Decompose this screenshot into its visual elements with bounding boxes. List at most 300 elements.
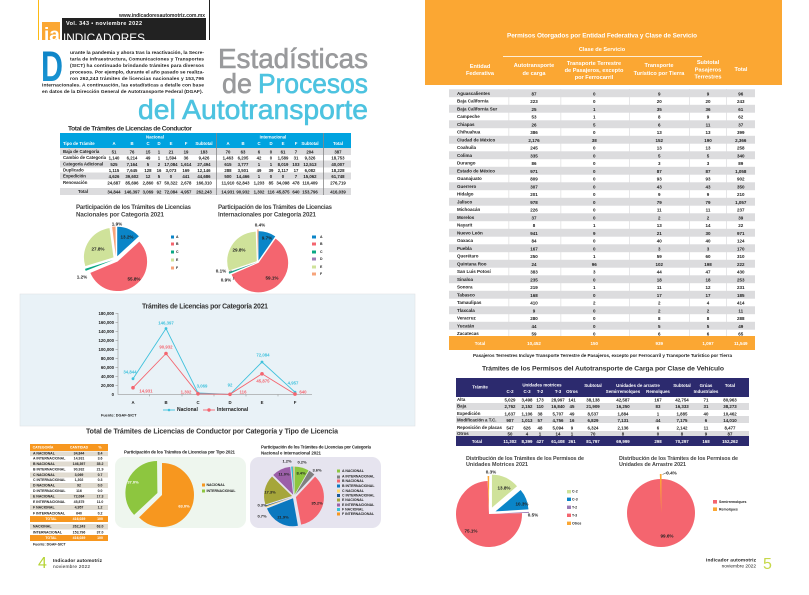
rows: 21: [657, 230, 662, 235]
rows: 1,013: [522, 418, 533, 422]
series: internacional: 14,931: [139, 388, 153, 394]
table rows: 2,678: [181, 180, 192, 185]
table rows: 0: [270, 174, 273, 178]
rows: 90,932: [74, 467, 84, 471]
series: nacional: 92: [228, 382, 233, 388]
rows: A NACIONAL: [33, 452, 56, 456]
column headings: Federativa: [466, 71, 495, 77]
rows: Sonora: [457, 284, 473, 290]
rows: 40: [705, 238, 711, 243]
total row: 427: [536, 438, 544, 444]
rows: 1.2: [98, 505, 102, 509]
rows: 245: [530, 145, 538, 150]
table rows: 70: [226, 149, 231, 154]
rows: 3,498: [522, 397, 533, 402]
rows: 6: [657, 425, 660, 430]
table rows: 3,069: [143, 189, 154, 194]
rows: 210: [737, 192, 745, 196]
rows: 243: [737, 98, 745, 104]
table rows: 166,310: [196, 180, 212, 185]
rows: 0: [593, 199, 596, 204]
rows: 2: [658, 215, 661, 220]
table rows: Renovación: [63, 180, 88, 185]
rows: 1: [539, 431, 542, 436]
rows: 35: [657, 106, 662, 111]
class heading: Clase de Servicio: [579, 47, 626, 53]
rows: 42,754: [675, 397, 689, 402]
pie legend: Otros: [572, 521, 581, 525]
rows: TOTAL: [45, 536, 58, 540]
table rows: 51: [112, 149, 117, 154]
rows: 50: [508, 431, 513, 436]
rows: 8: [533, 222, 536, 228]
rows: 153,796: [73, 530, 85, 534]
rows: Reposición de placas: [457, 425, 502, 430]
rows: 5,707: [552, 411, 564, 416]
rows: Modificación a T.C.: [457, 418, 497, 422]
total row: Total: [472, 438, 482, 444]
header labels: %: [98, 446, 102, 450]
footer: page 4: Indicador automotriz: [53, 558, 103, 564]
table rows: 61: [281, 149, 286, 154]
column headings: Autotransporte: [514, 63, 554, 69]
rows: 2,762: [504, 404, 516, 408]
pie value labels: 0.4%: [255, 222, 265, 228]
rows: 640: [76, 511, 82, 515]
table rows: 640: [292, 189, 300, 194]
table rows: 18,228: [331, 168, 345, 172]
table rows: 262,243: [196, 189, 212, 194]
rows: 350: [737, 184, 745, 189]
pie legend: NACIONAL: [206, 483, 226, 487]
rows: 0: [593, 176, 596, 181]
pie legend: C: [176, 250, 179, 254]
rows: 63.0: [97, 525, 103, 529]
table rows: 1,463: [223, 155, 234, 160]
rows: 45: [570, 404, 575, 408]
pie value labels: 3.6%: [312, 468, 322, 472]
rows: 110: [536, 404, 544, 408]
intro paragraph with drop cap: taría de Infraestructura, Comunicaciones y Transportes: [70, 56, 204, 62]
rows: 1,057: [735, 199, 747, 204]
table rows: 9,426: [199, 155, 210, 160]
table rows: 18,753: [331, 155, 345, 160]
pie value labels: 59.1%: [265, 276, 279, 280]
rows: 124: [737, 238, 745, 243]
rows: [457, 397, 737, 436]
chart heading: Distribución de los Trámites de los Permisos de: [619, 456, 738, 462]
table header labels: Total: [333, 140, 343, 146]
rows: 39: [738, 215, 744, 220]
rows: 1,885: [676, 411, 688, 416]
table rows: 7: [295, 149, 298, 154]
chart heading: Nacional e Internacional 2021: [261, 450, 322, 456]
table rows: 85,696: [125, 180, 139, 185]
table rows: 500: [224, 174, 232, 178]
table rows: 1: [158, 155, 161, 160]
rows: 11.0: [97, 500, 103, 504]
rows: 18: [705, 277, 711, 282]
rows: 223: [530, 98, 538, 104]
pie value labels: 0.3%: [257, 502, 267, 508]
axes: 140,000: [98, 329, 115, 334]
rows: 9: [658, 91, 661, 96]
pie value labels: 17.3%: [264, 490, 276, 494]
rows: 978: [530, 199, 538, 204]
table header band: [60, 133, 351, 148]
table rows: 615: [224, 162, 232, 166]
rows: 9: [707, 114, 710, 119]
table rows: 61,748: [331, 174, 345, 178]
table rows: 85: [269, 180, 274, 185]
rows: Jalisco: [457, 199, 473, 204]
table rows: 16: [157, 168, 162, 172]
rows: 288: [737, 316, 745, 320]
table rows: 3,501: [238, 168, 249, 172]
row bands: [449, 89, 755, 330]
total row: 8,399: [522, 438, 533, 444]
rows: 1,637: [504, 411, 516, 416]
rows: 7,131: [618, 418, 629, 422]
pie legend: A: [320, 235, 323, 239]
table rows: 4,957: [181, 189, 192, 194]
rows: 414: [737, 300, 745, 305]
table rows: 116: [268, 189, 275, 194]
rows: 79: [705, 199, 711, 204]
column headings: Entidad: [470, 64, 491, 70]
rows: 40: [704, 411, 709, 416]
rows: 20: [657, 98, 662, 104]
rows: 1,884: [618, 411, 629, 416]
header labels: [472, 382, 735, 394]
rows: Durango: [457, 160, 476, 166]
rows: 173: [536, 397, 544, 402]
rows: 9: [533, 308, 536, 313]
rows: 258: [737, 145, 745, 150]
rows: Coahuila: [457, 145, 476, 150]
rows: 9: [593, 230, 596, 235]
pie legend: Semirremolques: [719, 500, 746, 504]
rows: Baja California: [457, 98, 489, 104]
leader lines: [229, 271, 234, 280]
pie legend: [713, 500, 746, 511]
rows: 3.6: [98, 457, 102, 461]
rows: 36: [705, 106, 711, 111]
rows: E INTERNACIONAL: [33, 500, 66, 504]
total row: 61,408: [551, 438, 565, 444]
intro paragraph with drop cap: urante la pandemia y ahora tras la reactivación, la Secre-: [70, 50, 204, 56]
column headings: por Ferrocarril: [575, 75, 614, 81]
table rows: 1,302: [254, 189, 265, 194]
column headings: Pasajeros: [695, 68, 721, 74]
intro paragraph with drop cap: en datos de la Dirección General de Autotransporte Federal (DGAF).: [42, 89, 204, 95]
rows: 971: [737, 230, 745, 235]
rows: 87: [728, 431, 733, 436]
column headings: Transporte: [645, 63, 673, 69]
rows: 399: [737, 130, 745, 134]
rows: 87: [657, 168, 662, 173]
rows: 416,039: [73, 536, 85, 540]
chart legend: [163, 407, 249, 413]
table rows: 14,466: [236, 174, 250, 178]
rows: 83: [656, 404, 661, 408]
rows: 14,931: [74, 457, 84, 461]
table rows: Cambio de Categoría: [63, 155, 107, 160]
total row: [456, 436, 749, 446]
rows: 253: [737, 277, 745, 282]
table header labels: E: [282, 140, 285, 146]
column headings: Terrestres: [695, 74, 721, 80]
rows: 12: [705, 284, 711, 290]
rows: 0: [593, 145, 596, 150]
rows: 21,909: [586, 404, 600, 408]
panel: orange header permisos por entidad: [425, 0, 782, 85]
series: internacional: 116: [240, 390, 247, 394]
table rows: 1: [158, 149, 161, 154]
table rows: 153,796: [302, 189, 318, 194]
pie legend: A: [176, 235, 179, 239]
pie value labels: 37.0%: [127, 480, 139, 484]
rows: 14,010: [723, 418, 737, 422]
axes: 80,000: [101, 356, 115, 361]
rows: Morelos: [457, 215, 475, 220]
chart legend: Internacional: [217, 407, 249, 413]
pie legend: C-3: [572, 497, 578, 501]
table rows: 63: [241, 149, 246, 154]
rows: Michoacán: [457, 207, 481, 212]
header labels: C-3: [523, 388, 531, 394]
rows: 2,366: [735, 137, 747, 142]
table rows: 7,645: [127, 168, 138, 172]
total row: [449, 336, 755, 350]
rows: 59: [531, 331, 537, 336]
heading: Permisos Otorgados por Entidad Federativa y Clase de Servicio: [507, 32, 697, 40]
table rows: 146,397: [124, 189, 140, 194]
table rows: 276,719: [330, 180, 346, 185]
rows: 9: [658, 192, 661, 196]
axes: A: [131, 400, 135, 404]
pie slices: [627, 473, 695, 547]
table rows: 6: [258, 149, 261, 154]
rows: 1: [593, 114, 596, 119]
rows: 152: [656, 137, 664, 142]
header band: [456, 378, 749, 397]
table note: Pasajeros Terrestres Incluye Transporte Terrestre de Pasajeros, excepto por Ferrocarril y Transporte Turístico por Tierra: [473, 353, 732, 358]
page header: masthead: INDICADORES: [63, 31, 145, 45]
column headings: [466, 60, 748, 81]
rows: 3: [707, 160, 710, 166]
rows: 11: [706, 122, 711, 127]
rows: 971: [530, 168, 538, 173]
chart heading: [261, 444, 372, 456]
intro paragraph with drop cap: ron 262,243 trámites de licencias nacionales y 153,796: [70, 76, 204, 82]
rows: A INTERNACIONAL: [33, 457, 66, 461]
rows: 0: [593, 277, 596, 282]
panel background: [250, 457, 381, 528]
table rows: 1,115: [109, 168, 120, 172]
rows: 2,142: [676, 425, 688, 430]
rows: Baja: [457, 404, 467, 408]
table rows: 204: [306, 149, 314, 154]
table rows: 40,007: [331, 162, 345, 166]
rows: 14: [556, 431, 561, 436]
series: nacional: 34,844: [123, 370, 137, 374]
main title: Estadísticas: [218, 43, 368, 74]
chart heading: Unidades de Arrastre 2021: [619, 462, 686, 468]
axes: D: [228, 400, 232, 404]
rows: Veracruz: [457, 316, 477, 320]
table rows: 17: [294, 168, 299, 172]
rows: 4,957: [75, 505, 83, 509]
header labels: CANTIDAD: [70, 446, 89, 450]
rows: 48: [538, 425, 543, 430]
rows: 1: [593, 284, 596, 290]
table rows: 1: [258, 162, 261, 166]
rows: 16,250: [616, 404, 630, 408]
rows: 198: [704, 261, 712, 266]
table rows: 7,164: [127, 162, 138, 166]
rows: Nuevo León: [457, 230, 483, 235]
rows: 38,138: [586, 397, 600, 402]
rows: 170: [737, 246, 745, 251]
rows: 2,136: [618, 425, 629, 430]
rows: 0: [593, 91, 596, 96]
rows: 100: [97, 517, 103, 521]
table rows: 0: [282, 174, 285, 178]
table: total de trámites de licencias de conductor: [60, 126, 351, 195]
rows: 8,537: [588, 411, 599, 416]
rows: [33, 452, 103, 540]
rows: 53: [531, 114, 537, 119]
pie chart: licencias internacionales por categoría: [216, 204, 333, 283]
pie value labels: [216, 222, 279, 282]
rows: 22: [738, 222, 744, 228]
rows: 167: [530, 246, 538, 251]
table rows: 11,910: [222, 180, 235, 185]
rows: 4: [707, 300, 710, 305]
pie value labels: 0.5%: [528, 512, 538, 518]
rows: 0: [593, 160, 596, 166]
table header labels: E: [170, 140, 173, 146]
main title: de: [222, 68, 252, 99]
rows: 6,324: [588, 425, 599, 430]
rows: 6: [658, 331, 661, 336]
pie value labels: 10.3%: [515, 502, 529, 506]
series: nacional: 4,957: [288, 380, 299, 386]
column headings: Turístico por Tierra: [634, 71, 685, 77]
chart heading: [466, 456, 584, 468]
rows: 65: [738, 331, 744, 336]
pie legend: E NACIONAL: [342, 498, 365, 502]
series: internacional: [131, 344, 307, 396]
rows: 5,094: [552, 425, 564, 430]
rows: 3: [658, 160, 661, 166]
total row: 152,262: [722, 438, 738, 444]
rows: F INTERNACIONAL: [33, 511, 66, 515]
pie value labels: 13.8%: [497, 486, 511, 490]
rows: 1: [657, 411, 660, 416]
rows: 37: [531, 215, 537, 220]
pie value labels: 55.8%: [127, 276, 141, 282]
rows: 235: [530, 277, 538, 282]
total row: Total: [475, 340, 485, 346]
rows: 93: [657, 176, 662, 181]
rows: 47: [705, 269, 711, 274]
rows: 2: [658, 300, 661, 305]
table rows: 4,626: [109, 174, 120, 178]
table rows: 90,932: [236, 189, 250, 194]
axes: C: [196, 400, 200, 404]
table heading: Trámites de los Permisos del Autotransporte de Carga por Clase de Vehículo: [482, 366, 724, 372]
orange header and totals: [30, 444, 108, 541]
pie legend: A INTERNACIONAL: [342, 474, 375, 478]
rows: F NACIONAL: [33, 505, 55, 509]
rows: 416,039: [73, 517, 85, 521]
rows: 201: [530, 192, 538, 196]
table: permisos por entidad federativa: [449, 89, 755, 358]
pie value labels: 1.2%: [282, 458, 292, 464]
table rows: 50,322: [164, 180, 178, 185]
rows: 0.3: [98, 478, 102, 482]
row bands: [30, 452, 108, 530]
total row: 11,302: [503, 438, 517, 444]
table rows: 387: [334, 149, 342, 154]
table rows: 525: [110, 162, 118, 166]
pie legend: T-3: [572, 513, 577, 517]
rows: 0: [593, 98, 596, 104]
rows: 87: [531, 91, 537, 96]
table rows: 12,146: [197, 168, 211, 172]
table rows: 67: [157, 180, 162, 185]
chart heading: Participación de los Trámites de Licencias: [218, 204, 333, 211]
table rows: 1,140: [109, 155, 120, 160]
pie value labels: 0.2%: [297, 460, 307, 464]
table rows: 1: [270, 162, 273, 166]
table heading: Total de Trámites de Licencias de Conductor: [68, 126, 192, 132]
page header: masthead: [36, 0, 212, 46]
table rows: 0: [270, 155, 273, 160]
rows: 72,084: [74, 495, 84, 499]
rows: 44: [657, 269, 662, 274]
source note: Fuente: DGAF-SICT: [101, 414, 137, 418]
rows: 547: [506, 425, 514, 430]
rows: TOTAL: [45, 517, 58, 521]
rows: Guerrero: [457, 184, 477, 189]
axes: 20,000: [101, 383, 115, 388]
table header labels: A: [112, 140, 116, 146]
rows: 21.9: [97, 467, 103, 471]
table rows: 49: [146, 155, 151, 160]
axes: 160,000: [98, 320, 115, 325]
rows: 3: [593, 269, 596, 274]
rows: Baja California Sur: [457, 106, 498, 111]
header labels: [33, 444, 102, 450]
rows: 1,058: [735, 168, 747, 173]
table rows: 2,860: [143, 180, 154, 185]
rows: 11: [704, 425, 709, 430]
pie legend: Remolques: [719, 507, 738, 511]
pie legend: F NACIONAL: [342, 508, 364, 512]
pie legend: [202, 483, 236, 493]
table rows: 42: [257, 155, 262, 160]
rows: 0: [593, 323, 596, 328]
rows: 44: [656, 418, 661, 422]
table rows: Duplicado: [63, 168, 84, 172]
rows: 96: [738, 91, 744, 96]
pie value labels: 21.9%: [277, 514, 289, 520]
table rows: 2,117: [278, 168, 289, 172]
chart heading: [619, 456, 738, 468]
